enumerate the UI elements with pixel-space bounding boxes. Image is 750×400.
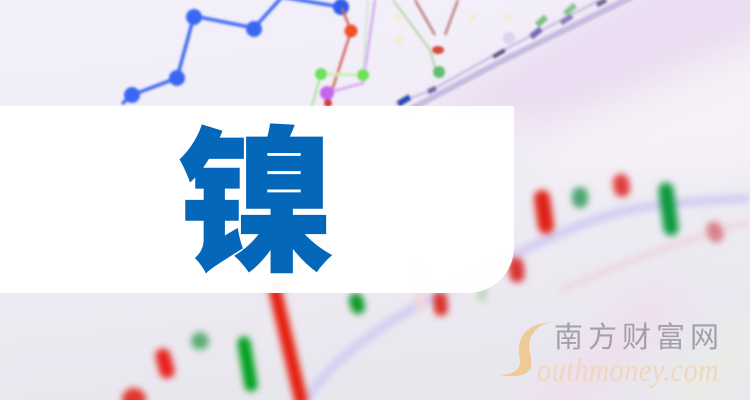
coloured line chart [312,0,458,107]
icon: orange swoosh S [500,322,555,376]
watermark url: outhmoney.com [537,353,719,389]
white title panel [0,106,514,293]
blue line chart [122,0,349,104]
diagonal lavender trend band [394,0,642,112]
candlesticks [122,182,716,400]
watermark Chinese name: 南方财富网 [554,322,724,354]
title character: 镍 [178,118,334,292]
watermark logo [500,322,724,389]
lavender moving average curves [306,198,750,400]
